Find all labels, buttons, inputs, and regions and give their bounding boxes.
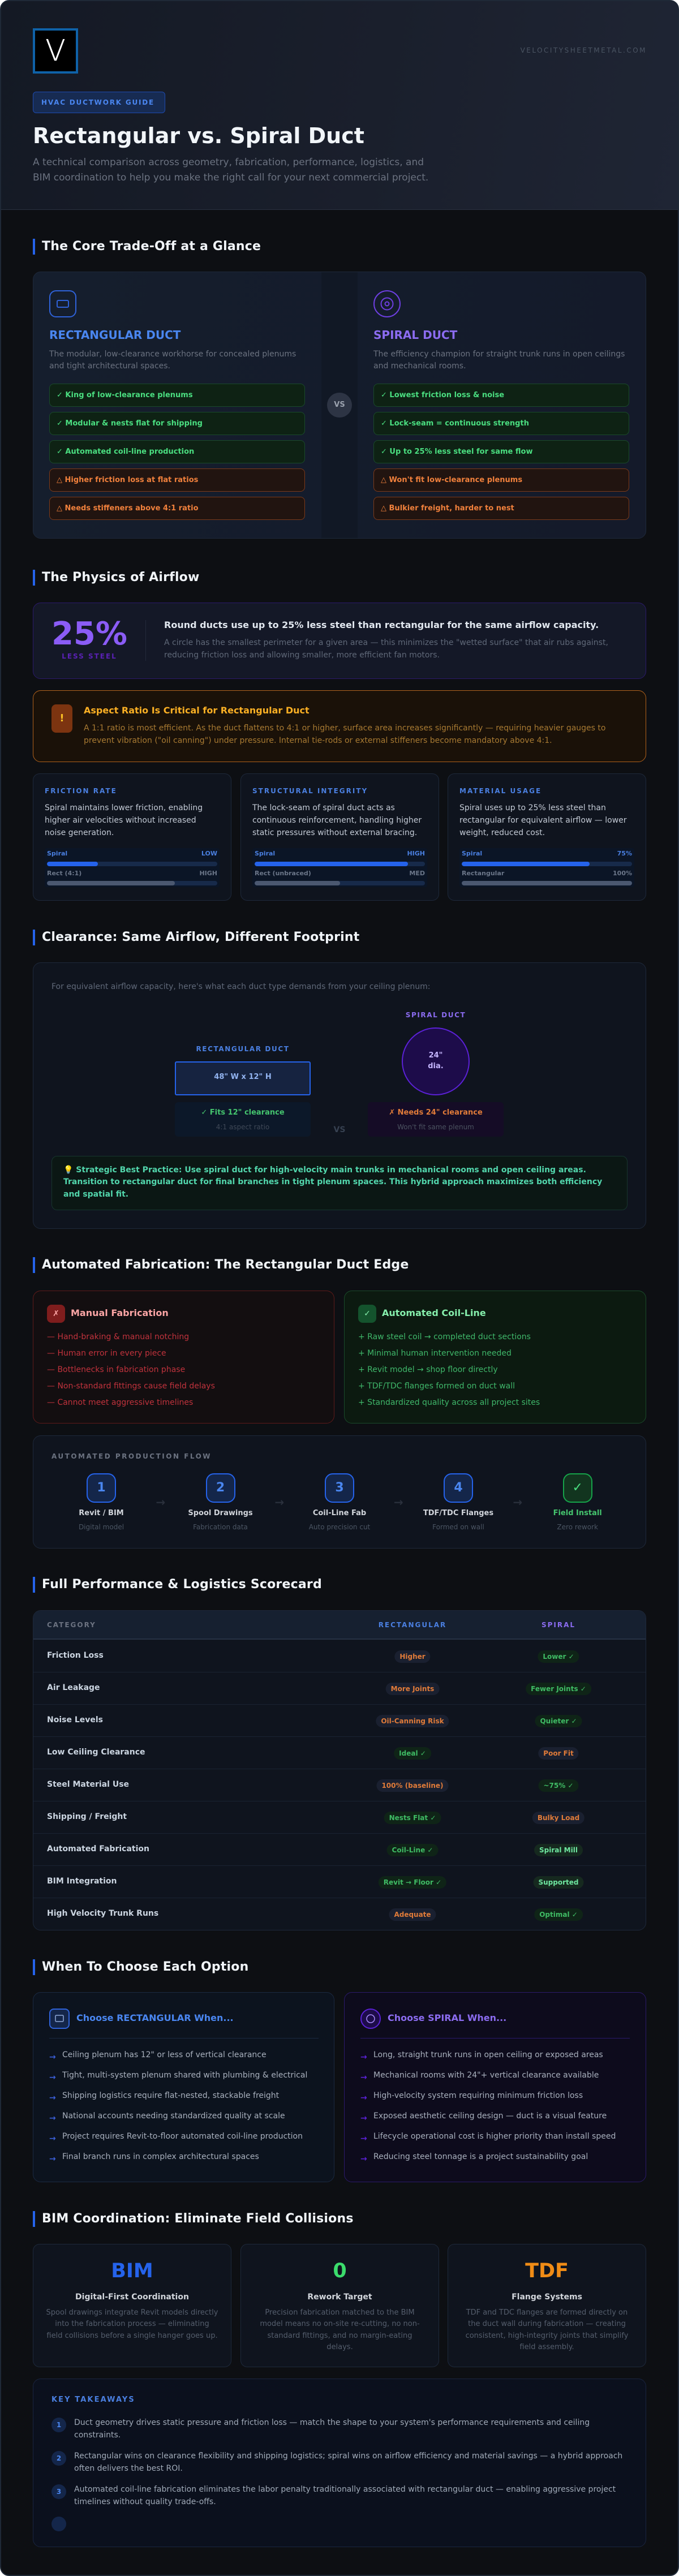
warning text (84, 724, 605, 745)
arrow: → (156, 1495, 165, 1509)
automated title: Automated Coil-Line (382, 1308, 486, 1318)
row: air leakage: Fewer Joints ✓ (531, 1685, 586, 1693)
text (46, 2308, 218, 2340)
card text: Spiral uses up to 25% less steel than (459, 803, 606, 812)
card text: continuous reinforcement, handling higher (252, 816, 422, 825)
result (368, 1102, 504, 1136)
row: high velocity: Adequate (394, 1910, 431, 1918)
panel: choose rectangular (33, 1992, 334, 2182)
row: noise levels: Noise Levels (47, 1715, 103, 1724)
text: standard fittings, and no margin-eating (268, 2332, 412, 2340)
result: ✓ Fits 12" clearance (201, 1108, 285, 1117)
card: friction rate (33, 773, 231, 901)
automated list: + Raw steel coil → completed duct sections (358, 1332, 531, 1341)
bars: Spiral (255, 850, 275, 857)
panel: key takeaways (33, 2379, 646, 2547)
card text: The lock-seam of spiral duct acts as (252, 803, 395, 812)
vs badge (327, 393, 352, 418)
circle shape (402, 1027, 470, 1095)
vs label: VS (334, 1125, 345, 1134)
card text: rectangular for equivalent airflow — lower (459, 816, 627, 825)
arrow: → (275, 1495, 284, 1509)
icon: rectangle (49, 2009, 70, 2029)
heading: bim: BIM Coordination: Eliminate Field Collisions (42, 2212, 354, 2226)
automated list: + TDF/TDC flanges formed on duct wall (358, 1382, 515, 1391)
row: bim integration: Supported (539, 1878, 578, 1886)
title: Choose SPIRAL When... (388, 2012, 506, 2023)
arrow: → (394, 1495, 403, 1509)
heading: physics: The Physics of Airflow (42, 570, 200, 584)
automated list: + Revit model → shop floor directly (358, 1365, 498, 1374)
rectangular description (49, 350, 296, 371)
best practice callout: Transition to rectangular duct for final branches in tight plenum spaces. This hybrid approach maximizes both efficiency (63, 1177, 602, 1186)
text (260, 2308, 420, 2351)
step 4: 4 (454, 1481, 463, 1495)
heading: scorecard: Full Performance & Logistics Scorecard (42, 1577, 322, 1592)
row: low ceiling clearance: Poor Fit (543, 1749, 574, 1757)
best practice callout: 💡 Strategic Best Practice: Use spiral duct for high-velocity main trunks in mechanical rooms and open ceiling areas. (63, 1166, 586, 1175)
list: → (360, 2093, 367, 2102)
list: → (49, 2053, 56, 2062)
icon: cross: ✗ (53, 1309, 59, 1318)
big label: 0 (333, 2260, 347, 2282)
big label: BIM (111, 2260, 153, 2282)
step 1: Revit / BIM (79, 1509, 124, 1517)
row: friction loss: Higher (399, 1652, 426, 1660)
card: zero rework (240, 2244, 439, 2367)
list (360, 2050, 616, 2164)
card text (459, 803, 627, 837)
list: → (49, 2134, 56, 2143)
spiral title: SPIRAL DUCT (373, 328, 457, 342)
text: delays. (326, 2343, 353, 2351)
step 4: Formed on wall (432, 1523, 484, 1531)
panel: clearance (33, 962, 646, 1229)
card: material usage (448, 773, 646, 901)
list: → (360, 2114, 367, 2123)
warning text: prevent vibration ("oil canning") under pressure. Internal tie-rods or external stiffeners become mandatory above 4:1. (84, 736, 552, 745)
card: structural integrity (240, 773, 439, 901)
step 1: Digital model (79, 1523, 124, 1531)
panel: choose spiral (344, 1992, 646, 2182)
rectangular shape: 48" W x 12" H (214, 1073, 272, 1081)
logo: V (45, 34, 66, 68)
row: bim integration (33, 1865, 646, 1898)
step 5: Zero rework (557, 1523, 598, 1531)
automated list: + Minimal human intervention needed (358, 1349, 512, 1358)
list: → (49, 2093, 56, 2102)
list: → (49, 2114, 56, 2123)
stat label: LESS STEEL (62, 652, 117, 660)
manual title: Manual Fabrication (71, 1308, 169, 1318)
list: Project requires Revit-to-floor automated coil-line production (62, 2132, 303, 2141)
spiral diagram (368, 1011, 504, 1135)
list: Exposed aesthetic ceiling design — duct is a visual feature (373, 2111, 607, 2121)
bars: HIGH (407, 850, 425, 857)
manual list: — Hand-braking & manual notching (47, 1332, 189, 1341)
website url: VELOCITYSHEETMETAL.COM (521, 46, 647, 54)
list: Final branch runs in complex architectural spaces (62, 2152, 259, 2161)
manual list (47, 1332, 215, 1407)
card text: weight, reduced cost. (459, 828, 545, 837)
list: → (360, 2134, 367, 2143)
warning icon: ! (59, 712, 65, 724)
list: Long, straight trunk runs in open ceiling or exposed areas (373, 2050, 603, 2059)
text (466, 2308, 628, 2351)
list: High-velocity system requiring minimum friction loss (373, 2091, 583, 2100)
rectangular pros and cons: △ Needs stiffeners above 4:1 ratio (57, 504, 199, 513)
takeaway 3: timelines without quality trade-offs. (74, 2497, 216, 2506)
takeaway 3: Automated coil-line fabrication eliminates the labor penalty traditionally associated with rectangular duct — enabling aggressive project (74, 2485, 616, 2494)
panel: manual fabrication (33, 1291, 334, 1424)
card text: higher air velocities without increased (45, 816, 196, 825)
row: friction loss: Lower ✓ (543, 1652, 574, 1660)
step 2: Spool Drawings (188, 1509, 253, 1517)
text: model means no on-site re-cutting, no non- (260, 2320, 420, 2328)
rectangular diagram (175, 1045, 311, 1137)
vs badge: VS (334, 401, 345, 409)
automated list (358, 1332, 540, 1407)
icon: check: ✓ (364, 1309, 371, 1318)
title: Choose RECTANGULAR When... (76, 2012, 234, 2023)
card heading: STRUCTURAL INTEGRITY (252, 787, 368, 795)
card text: static pressures without external bracing. (252, 828, 417, 837)
list: Shipping logistics require flat-nested, stackable freight (62, 2091, 279, 2100)
rectangular column (49, 290, 305, 520)
bars: Rect (4:1) (47, 870, 81, 877)
step 2: Fabrication data (193, 1523, 248, 1531)
list: → (360, 2073, 367, 2082)
best practice callout (51, 1155, 628, 1210)
bars: Rect (unbraced) (255, 870, 311, 877)
icon: cross (47, 1305, 65, 1323)
warning text: A 1:1 ratio is most efficient. As the duct flattens to 4:1 or higher, surface area increases significantly — requiring heavier gauges to (84, 724, 605, 733)
scorecard table (33, 1610, 646, 1930)
panel: automated coil-line (344, 1291, 646, 1424)
takeaway 3 (51, 2484, 616, 2506)
empty takeaway marker (51, 2517, 66, 2531)
rectangular description: The modular, low-clearance workhorse for concealed plenums (49, 350, 296, 359)
heading: clearance: Clearance: Same Airflow, Different Footprint (42, 930, 359, 944)
row: friction loss: Friction Loss (47, 1651, 104, 1660)
bars (252, 848, 427, 887)
card text (252, 803, 422, 837)
subtitle: Flange Systems (512, 2293, 582, 2302)
step 5: Field Install (553, 1509, 602, 1517)
circle shape: 24" (429, 1051, 442, 1060)
text: Spool drawings integrate Revit models directly (46, 2308, 218, 2317)
step 4 (423, 1473, 493, 1531)
bars: HIGH (199, 870, 217, 877)
row: air leakage: Air Leakage (47, 1683, 100, 1692)
stat headline: Round ducts use up to 25% less steel than rectangular for the same airflow capacity. (164, 620, 599, 630)
arrow: → (513, 1495, 522, 1509)
card heading: MATERIAL USAGE (459, 787, 542, 795)
badge (33, 92, 165, 113)
row: noise levels: Oil-Canning Risk (381, 1717, 444, 1724)
list: National accounts needing standardized quality at scale (62, 2111, 285, 2121)
row: steel material use: Steel Material Use (47, 1780, 129, 1789)
spiral pros and cons: △ Won't fit low-clearance plenums (381, 475, 522, 484)
label: SPIRAL DUCT (406, 1011, 466, 1019)
row: friction loss (33, 1640, 646, 1672)
row: high velocity: Optimal ✓ (539, 1910, 578, 1918)
bars: 100% (613, 870, 632, 877)
row: automated fabrication: Automated Fabrication (47, 1844, 149, 1853)
panel: 25% stat (33, 603, 646, 679)
takeaway 2: 2 (57, 2454, 61, 2462)
panel: production flow (33, 1435, 646, 1549)
flow label: AUTOMATED PRODUCTION FLOW (51, 1452, 212, 1460)
row: steel material use: ~75% ✓ (543, 1781, 574, 1789)
bars: Spiral (462, 850, 482, 857)
list: Mechanical rooms with 24"+ vertical clearance available (373, 2071, 599, 2080)
bars: 75% (617, 850, 632, 857)
spiral description: The efficiency champion for straight trunk runs in open ceilings (373, 350, 625, 359)
step 4: TDF/TDC Flanges (423, 1509, 493, 1517)
result: 4:1 aspect ratio (216, 1123, 269, 1130)
bars: MED (409, 870, 425, 877)
bars: Spiral (47, 850, 67, 857)
subtitle: BIM coordination to help you make the right call for your next commercial project. (33, 172, 428, 183)
icon: rectangle (49, 290, 76, 317)
list: Tight, multi-system plenum shared with plumbing & electrical (62, 2071, 307, 2080)
list: Ceiling plenum has 12" or less of vertical clearance (62, 2050, 267, 2059)
divider (145, 620, 146, 661)
row: bim integration: Revit → Floor ✓ (384, 1878, 441, 1886)
subtitle: Rework Target (307, 2293, 372, 2302)
takeaway 1: Duct geometry drives static pressure and friction loss — match the shape to your system's performance requirements and ceiling (74, 2418, 590, 2427)
bars: LOW (201, 850, 217, 857)
takeaway 2: Rectangular wins on clearance flexibility and shipping logistics; spiral wins on airflow efficiency and material savings — a hybrid approach (74, 2452, 622, 2461)
step 3 (309, 1473, 370, 1531)
icon: circle (360, 2009, 381, 2029)
spiral pros and cons: ✓ Lowest friction loss & noise (381, 390, 504, 399)
row: high velocity: High Velocity Trunk Runs (47, 1909, 158, 1918)
list: → (49, 2073, 56, 2082)
table header: RECTANGULAR (379, 1621, 446, 1629)
list: → (49, 2154, 56, 2164)
panel: comparison (33, 272, 646, 539)
takeaway 1: constraints. (74, 2431, 121, 2440)
subtitle: Digital-First Coordination (75, 2293, 189, 2302)
row: shipping freight: Shipping / Freight (47, 1812, 127, 1821)
spiral description (373, 350, 625, 371)
subtitle (33, 157, 428, 183)
list (49, 2050, 307, 2164)
heading: when to choose: When To Choose Each Option (42, 1960, 248, 1974)
rectangular pros and cons: ✓ Automated coil-line production (57, 447, 194, 456)
spiral description: and mechanical rooms. (373, 362, 466, 371)
manual list: — Bottlenecks in fabrication phase (47, 1365, 185, 1374)
rectangular title: RECTANGULAR DUCT (49, 328, 181, 342)
row: low ceiling clearance (33, 1736, 646, 1769)
icon: spiral (373, 290, 401, 317)
row: steel material use (33, 1769, 646, 1801)
badge: HVAC DUCTWORK GUIDE (41, 98, 154, 106)
row: automated fabrication: Coil-Line ✓ (392, 1846, 433, 1853)
divider (360, 2038, 630, 2039)
takeaway 1 (51, 2418, 590, 2440)
big stat: 25% (51, 616, 127, 652)
table header: CATEGORY (47, 1621, 96, 1629)
stat text: A circle has the smallest perimeter for a given area — this minimizes the "wetted surface" that air rubs against, (164, 638, 608, 647)
manual list: — Human error in every piece (47, 1349, 166, 1358)
row: shipping freight: Bulky Load (538, 1814, 579, 1822)
table header (33, 1611, 646, 1640)
takeaway 2 (51, 2451, 622, 2473)
spiral column (373, 290, 629, 520)
best practice callout: and spatial fit. (63, 1189, 128, 1198)
bars (45, 848, 220, 887)
spiral pros and cons: ✓ Up to 25% less steel for same flow (381, 447, 532, 456)
stat text: reducing friction loss and allowing smaller, more efficient fan motors. (164, 651, 440, 660)
takeaway 1: 1 (57, 2421, 61, 2429)
list: Reducing steel tonnage is a project sustainability goal (373, 2152, 588, 2161)
text: the duct wall during fabrication — creating (468, 2320, 626, 2328)
list: Lifecycle operational cost is higher priority than install speed (373, 2132, 616, 2141)
divider (49, 2038, 319, 2039)
list: → (360, 2053, 367, 2062)
rectangular pros and cons: ✓ Modular & nests flat for shipping (57, 419, 203, 428)
step 2 (188, 1473, 253, 1531)
stat text (164, 638, 608, 660)
row: shipping freight (33, 1801, 646, 1833)
row: low ceiling clearance: Ideal ✓ (399, 1749, 426, 1757)
bars: Rectangular (462, 870, 504, 877)
spiral pros and cons: ✓ Lock-seam = continuous strength (381, 419, 529, 428)
text: field collisions before a single hanger goes up. (46, 2332, 218, 2340)
spiral pros and cons: △ Bulkier freight, harder to nest (381, 504, 514, 513)
step 5 (553, 1473, 602, 1531)
warning title: Aspect Ratio Is Critical for Rectangular Duct (84, 705, 310, 716)
row: automated fabrication: Spiral Mill (539, 1846, 578, 1853)
rectangular pros and cons (49, 384, 305, 520)
result: ✗ Needs 24" clearance (389, 1108, 483, 1117)
takeaway 3: 3 (57, 2488, 61, 2496)
step 5: ✓ (572, 1481, 583, 1495)
step 1 (79, 1473, 124, 1531)
bars (459, 848, 634, 887)
row: high velocity (33, 1898, 646, 1930)
rectangular pros and cons: ✓ King of low-clearance plenums (57, 390, 193, 399)
takeaways heading: KEY TAKEAWAYS (51, 2396, 135, 2403)
manual list: — Cannot meet aggressive timelines (47, 1398, 193, 1407)
result (175, 1102, 311, 1136)
heading: core trade-off: The Core Trade-Off at a Glance (42, 239, 261, 253)
card text: Spiral maintains lower friction, enabling (45, 803, 203, 812)
step 1: 1 (97, 1481, 106, 1495)
text: consistent, high-integrity joints that simplify (466, 2332, 628, 2340)
table header: SPIRAL (542, 1621, 575, 1629)
row: air leakage: More Joints (391, 1685, 434, 1693)
warning icon (51, 704, 72, 733)
text: TDF and TDC flanges are formed directly on (466, 2308, 628, 2317)
automated list: + Standardized quality across all project sites (358, 1398, 540, 1407)
list: → (360, 2154, 367, 2164)
heading: fabrication: Automated Fabrication: The Rectangular Duct Edge (42, 1258, 409, 1272)
row: bim integration: BIM Integration (47, 1877, 117, 1886)
label: RECTANGULAR DUCT (196, 1045, 290, 1053)
circle shape: dia. (428, 1062, 444, 1070)
text: into the fabrication process — eliminating (55, 2320, 209, 2328)
intro text: For equivalent airflow capacity, here's what each duct type demands from your ceiling plenum: (51, 982, 430, 991)
rectangular description: and tight architectural spaces. (49, 362, 170, 371)
rectangular shape (175, 1061, 311, 1095)
card text: noise generation. (45, 828, 114, 837)
step 2: 2 (216, 1481, 225, 1495)
card: tdf (448, 2244, 646, 2367)
row: air leakage (33, 1672, 646, 1704)
row: shipping freight: Nests Flat ✓ (389, 1814, 436, 1822)
card heading: FRICTION RATE (45, 787, 117, 795)
big label: TDF (525, 2260, 569, 2282)
spiral pros and cons (373, 384, 629, 520)
step 3: Auto precision cut (309, 1523, 370, 1531)
row: noise levels: Quieter ✓ (540, 1717, 577, 1724)
step 3: 3 (335, 1481, 344, 1495)
header (0, 0, 679, 210)
icon: check (358, 1305, 376, 1323)
vs column (321, 272, 358, 538)
text: Precision fabrication matched to the BIM (265, 2308, 415, 2317)
row: low ceiling clearance: Low Ceiling Clearance (47, 1748, 145, 1757)
row: noise levels (33, 1704, 646, 1736)
logo (33, 28, 78, 74)
title: Rectangular vs. Spiral Duct (33, 123, 364, 148)
step 3: Coil-Line Fab (313, 1509, 366, 1517)
manual list: — Non-standard fittings cause field delays (47, 1382, 215, 1391)
card text (45, 803, 203, 837)
text: field assembly. (519, 2343, 574, 2351)
panel: aspect ratio warning (33, 690, 646, 762)
takeaway 2: often delivers the best ROI. (74, 2464, 183, 2473)
rectangular pros and cons: △ Higher friction loss at flat ratios (57, 475, 198, 484)
subtitle: A technical comparison across geometry, fabrication, performance, logistics, and (33, 157, 424, 168)
row: steel material use: 100% (baseline) (381, 1781, 444, 1789)
card: bim (33, 2244, 231, 2367)
row: automated fabrication (33, 1833, 646, 1865)
result: Won't fit same plenum (397, 1123, 474, 1130)
